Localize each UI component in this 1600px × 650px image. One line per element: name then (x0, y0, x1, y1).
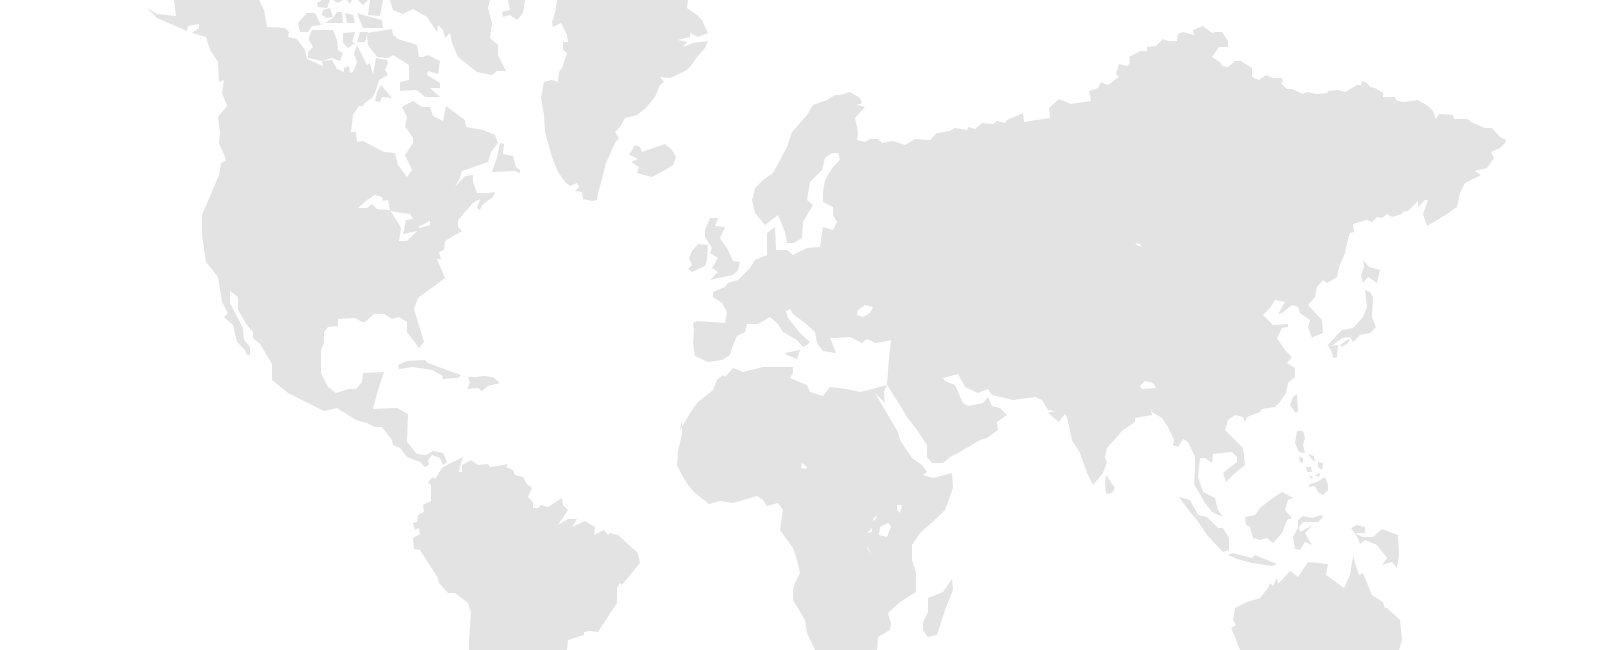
Madagascar (923, 579, 953, 637)
Cuba (398, 360, 461, 379)
Great Lakes (358, 195, 430, 241)
Indonesia and New Guinea (1179, 492, 1399, 568)
North America (147, 0, 525, 467)
Africa (677, 367, 953, 650)
Australia (1231, 556, 1402, 650)
Hispaniola (467, 376, 500, 391)
Eurasia (693, 26, 1506, 517)
Taiwan (1290, 394, 1298, 412)
Arctic islands (298, 0, 525, 102)
Sicily (785, 350, 800, 359)
Ireland (688, 244, 708, 272)
Iceland (629, 144, 676, 177)
Philippines (1295, 431, 1328, 495)
Japan (1327, 260, 1380, 358)
Newfoundland (492, 143, 520, 173)
Sri Lanka (1105, 475, 1115, 494)
African lakes (801, 463, 902, 563)
Greenland (541, 0, 708, 201)
Great Britain (705, 218, 740, 280)
South America (413, 457, 640, 650)
inland seas and lakes of Eurasia (857, 243, 1156, 389)
